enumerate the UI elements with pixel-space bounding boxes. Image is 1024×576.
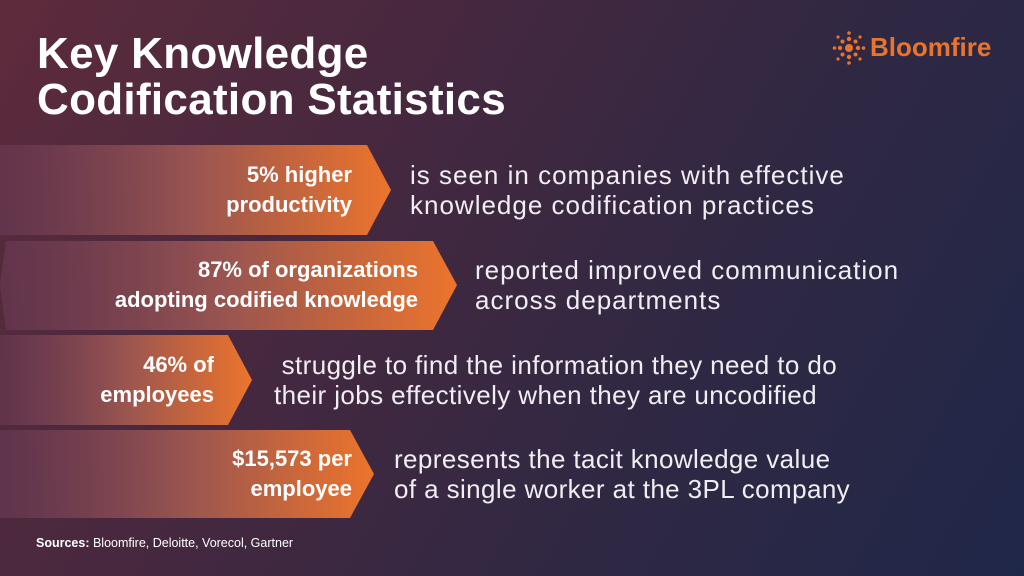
arrow 2 <box>0 241 457 330</box>
arrow 3 description <box>274 350 837 410</box>
arrow 4 description <box>394 444 850 504</box>
arrow 1 description: knowledge codification practices <box>410 190 815 220</box>
title: Codification Statistics <box>37 75 506 124</box>
arrow 2 label: 87% of organizations <box>198 257 418 282</box>
arrow 2 description <box>475 255 899 315</box>
arrow 4 label: $15,573 per <box>232 446 352 471</box>
arrow 2 label <box>115 257 418 312</box>
arrow 1 label <box>226 162 352 217</box>
arrow 3 <box>0 335 252 425</box>
logo: Bloomfire <box>832 31 991 65</box>
arrow 1 description <box>410 160 845 220</box>
arrow 4 description: of a single worker at the 3PL company <box>394 474 850 504</box>
title: Key Knowledge <box>37 29 369 78</box>
title <box>37 29 506 124</box>
arrow 1 description: is seen in companies with effective <box>410 160 845 190</box>
arrow 4 description: represents the tacit knowledge value <box>394 444 830 474</box>
arrow 1 label: productivity <box>226 192 352 217</box>
arrow 1 <box>0 145 391 235</box>
arrow 2 description: across departments <box>475 285 721 315</box>
logo: Bloomfire: Bloomfire <box>870 32 991 62</box>
sources: Sources: Bloomfire, Deloitte, Vorecol, Gartner <box>36 536 293 550</box>
arrow 2 label: adopting codified knowledge <box>115 287 418 312</box>
arrow 3 label: 46% of <box>143 352 214 377</box>
arrow 4 label: employee <box>250 476 352 501</box>
arrow 3 label <box>100 352 214 407</box>
arrow 3 description: struggle to find the information they need to do <box>282 350 837 380</box>
arrow 3 label: employees <box>100 382 214 407</box>
arrow 3 description: their jobs effectively when they are uncodified <box>274 380 817 410</box>
arrow 2 description: reported improved communication <box>475 255 899 285</box>
arrow 4 label <box>232 446 352 501</box>
arrow 1 label: 5% higher <box>247 162 352 187</box>
arrow 4 <box>0 430 374 518</box>
